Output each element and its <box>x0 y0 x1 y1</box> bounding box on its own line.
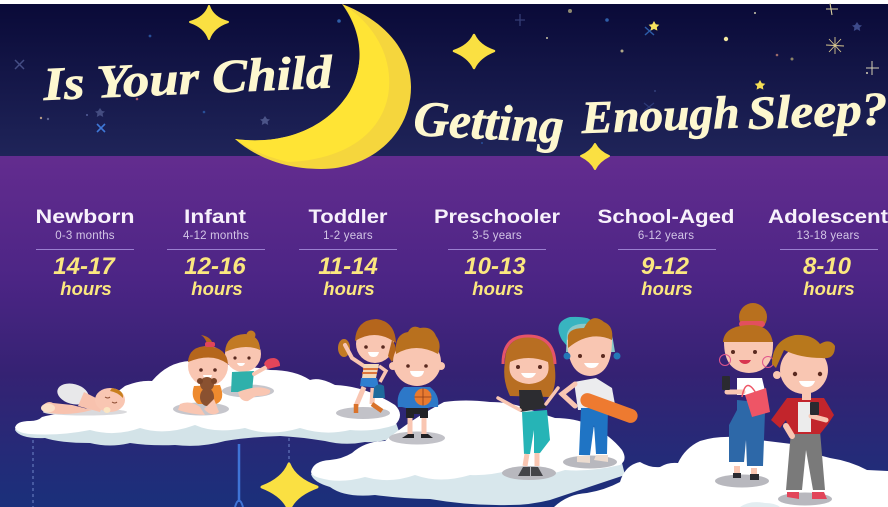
column: Newborn: 14-17 <box>53 253 116 280</box>
column: Preschooler: 3-5 years <box>472 230 522 242</box>
icon: bottom star <box>262 464 317 507</box>
character: sleeping newborn <box>41 380 127 416</box>
background: white top edge <box>0 0 888 4</box>
column: Toddler <box>299 207 397 299</box>
background: night sky <box>0 4 888 156</box>
icon: centre star <box>454 35 494 68</box>
character: preschool girl with headphones <box>498 336 558 480</box>
cloud: left <box>15 361 400 446</box>
column: Preschooler: hours <box>472 278 524 299</box>
icon: crescent moon <box>235 4 411 169</box>
column: Newborn <box>36 207 134 299</box>
title: Sleep?: Sleep? <box>747 83 888 140</box>
column: Preschooler: Preschooler <box>434 207 561 228</box>
column: Toddler: 11-14 <box>318 253 378 280</box>
cloud: right <box>554 437 888 507</box>
column: School-Aged <box>598 207 734 299</box>
column: School-Aged: School-Aged <box>598 207 734 228</box>
title: Getting: Getting <box>412 90 565 154</box>
icon: top star <box>190 6 228 39</box>
column: Newborn: Newborn <box>36 207 134 228</box>
character: teen boy with phone <box>771 335 835 506</box>
character: preschool boy with skateboard <box>558 317 640 468</box>
column: Toddler: hours <box>323 278 375 299</box>
column: School-Aged: 9-12 <box>641 253 690 280</box>
column: Adolescent: 13-18 years <box>797 230 860 242</box>
column: Adolescent: Adolescent <box>768 207 888 228</box>
column: School-Aged: hours <box>641 278 693 299</box>
column: Newborn: 0-3 months <box>55 230 115 242</box>
column: Newborn: hours <box>60 278 112 299</box>
column: Infant: hours <box>191 278 243 299</box>
column: Toddler: Toddler <box>308 207 388 228</box>
column: Infant <box>167 207 265 299</box>
column: Toddler: 1-2 years <box>323 230 373 242</box>
character: toddler boy with basketball <box>389 327 445 444</box>
character: toddler girl with backpack <box>336 319 396 419</box>
character: infant boy with toy car <box>222 330 280 401</box>
column: Adolescent <box>768 207 888 299</box>
icon: star on panel edge <box>581 144 609 169</box>
small background stars <box>15 3 879 144</box>
column: Infant: Infant <box>184 207 247 228</box>
column: Preschooler <box>434 207 561 299</box>
column: Preschooler: 10-13 <box>464 253 526 280</box>
character: infant girl with teddy <box>173 335 229 416</box>
character: teen girl with bag <box>715 303 774 488</box>
title: Is Your Child: Is Your Child <box>41 46 335 111</box>
column: School-Aged: 6-12 years <box>638 230 694 242</box>
title: Enough: Enough <box>580 87 740 143</box>
column: Adolescent: 8-10 <box>803 253 852 280</box>
background: purple to blue panel <box>0 156 888 507</box>
column: Infant: 12-16 <box>184 253 246 280</box>
hanging strings <box>33 438 289 507</box>
column: Adolescent: hours <box>803 278 855 299</box>
column: Infant: 4-12 months <box>183 230 249 242</box>
cloud: middle <box>311 400 625 505</box>
